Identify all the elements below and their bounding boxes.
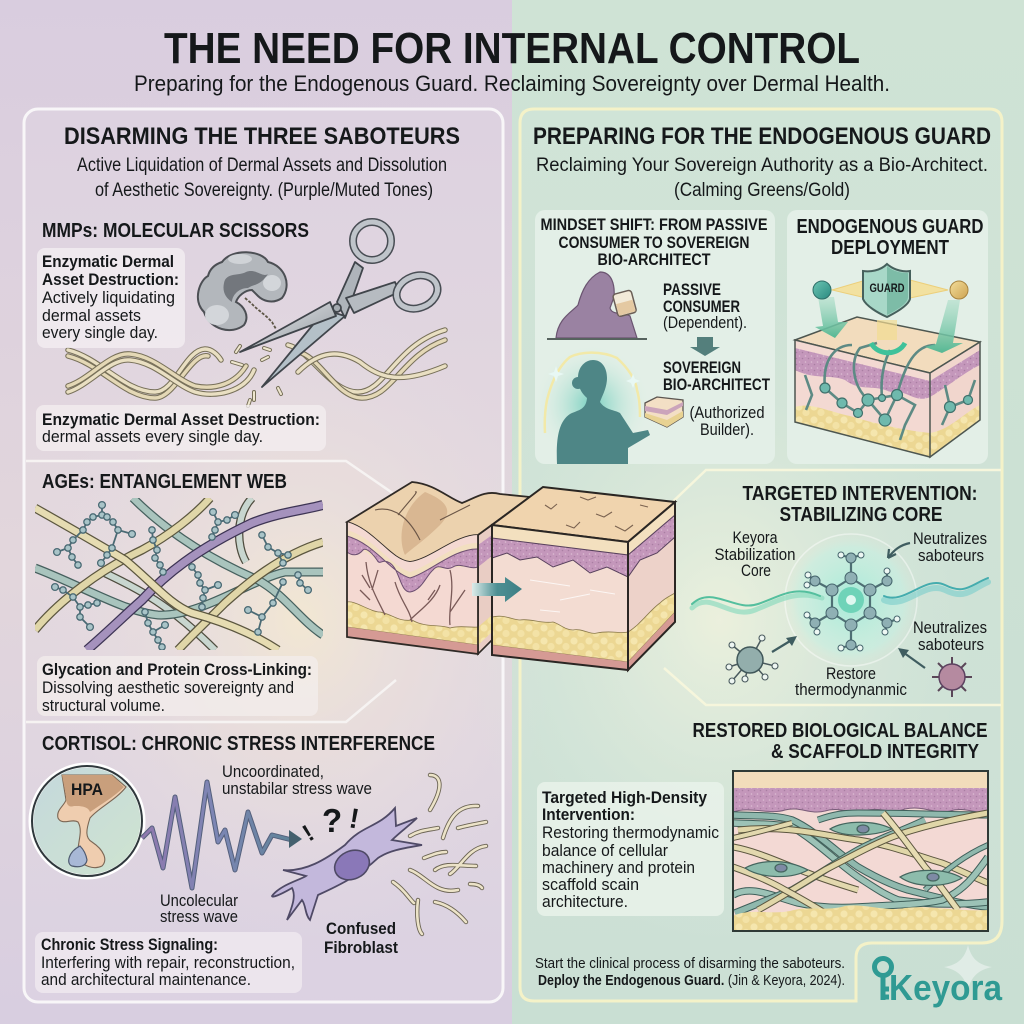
stabilization core label — [714, 529, 796, 580]
callout: targeted high-density — [537, 782, 724, 916]
icon: sovereign architect with aura — [544, 351, 650, 464]
logo: Keyora — [874, 945, 1003, 1008]
neutralizes label top: saboteurs — [918, 547, 984, 565]
callout: glycation and cross-linking: Glycation and Protein Cross-Linking: — [42, 661, 312, 679]
left panel heading: DISARMING THE THREE SABOTEURS — [64, 123, 460, 150]
callout: chronic stress signaling: and architectural maintenance. — [41, 971, 251, 989]
icon: confused fibroblast: ! — [347, 802, 362, 835]
callout: enzymatic destruction bottom: Enzymatic Dermal Asset Destruction: — [42, 411, 320, 429]
callout: glycation and cross-linking: structural volume. — [42, 697, 165, 715]
section: restored biological balance — [537, 668, 1001, 931]
MMPs heading: MMPs: MOLECULAR SCISSORS — [42, 219, 309, 242]
illustration: restored scaffold — [733, 771, 988, 931]
arrow: down — [690, 337, 720, 356]
icon: small grey saboteur — [726, 635, 797, 684]
icon: confused fibroblast — [272, 802, 422, 920]
section: AGEs entanglement web — [26, 461, 394, 716]
icon: teal sphere — [813, 281, 831, 299]
stress wave label bottom: Uncolecular — [160, 892, 238, 910]
AGEs heading: AGEs: ENTANGLEMENT WEB — [42, 470, 287, 493]
section: MMPs molecular scissors — [36, 219, 445, 451]
confused fibroblast label: Confused — [326, 920, 396, 938]
callout: targeted high-density: architecture. — [542, 893, 628, 911]
guard heading — [796, 215, 984, 259]
callout: chronic stress signaling — [35, 932, 302, 993]
closing statement: Start the clinical process of disarming the saboteurs. — [535, 956, 845, 972]
icon: stabilization glow — [785, 534, 917, 666]
icon: small purple saboteur — [898, 648, 972, 697]
left panel subheading — [77, 155, 447, 201]
healthy skin block — [492, 487, 675, 670]
mindset heading — [540, 216, 768, 269]
stress wave label top — [222, 763, 372, 798]
passive consumer text: CONSUMER — [663, 298, 740, 316]
callout: chronic stress signaling: Chronic Stress Signaling: — [41, 936, 218, 954]
right panel subheading: (Calming Greens/Gold) — [674, 180, 850, 201]
icon: wavy energy streams — [692, 578, 988, 612]
closing statement: Deploy the Endogenous Guard. (Jin & Keyora, 2024). — [538, 973, 845, 989]
section: cortisol chronic stress interference — [26, 680, 486, 993]
stress wave label bottom: stress wave — [160, 908, 238, 926]
icon: gold sphere — [950, 281, 968, 299]
right panel subheading: Reclaiming Your Sovereign Authority as a Bio-Architect. — [536, 155, 988, 176]
icon: skin block with network — [795, 317, 980, 457]
icon: guard shield: GUARD — [870, 283, 904, 295]
cortisol heading: CORTISOL: CHRONIC STRESS INTERFERENCE — [42, 732, 435, 755]
passive consumer text: (Dependent). — [663, 314, 747, 332]
restore label: thermodynanmic — [795, 681, 907, 699]
central illustration: skin blocks — [347, 482, 675, 670]
arrow: neutralizes pointer — [888, 543, 910, 558]
icon: guard shield — [863, 264, 910, 317]
arrow: right green beam — [925, 300, 963, 353]
icon: fragmented fibres — [393, 775, 486, 934]
callout: targeted high-density: Intervention: — [542, 806, 635, 824]
icon: twisted collagen fibres — [68, 330, 445, 406]
icon: grey MMP enzyme — [198, 252, 287, 330]
icon: scissors — [240, 222, 442, 387]
icon: hexagonal stabilization molecule — [804, 552, 900, 651]
neutralizes label top: Neutralizes — [913, 530, 987, 548]
stabilization core label: Stabilization — [714, 546, 796, 564]
callout: enzymatic destruction top: dermal assets — [42, 307, 141, 325]
callout: enzymatic destruction top: Enzymatic Dermal — [42, 253, 174, 271]
left panel subheading: Active Liquidation of Dermal Assets and Dissolution — [77, 155, 447, 176]
subtitle: Preparing for the Endogenous Guard. Reclaiming Sovereignty over Dermal Health. — [134, 71, 890, 96]
stabilization core label: Core — [741, 562, 771, 580]
sovereign architect text: Builder). — [700, 421, 754, 439]
callout: enzymatic destruction top: Asset Destruction: — [42, 271, 179, 289]
icon: HPA axis circle: HPA — [71, 781, 103, 799]
neutralizes label top — [913, 530, 987, 565]
passive consumer text — [663, 281, 747, 332]
sovereign architect text: BIO-ARCHITECT — [663, 376, 770, 394]
icon: gold link beams — [832, 280, 948, 298]
closing statement — [535, 956, 845, 989]
panel: disarming the three saboteurs — [24, 109, 503, 1002]
callout: enzymatic destruction bottom: dermal assets every single day. — [42, 428, 263, 446]
callout: targeted high-density: Targeted High-Density — [542, 789, 708, 807]
neutralizes label bottom — [913, 619, 987, 654]
damaged skin block — [347, 482, 530, 654]
passive consumer text: PASSIVE — [663, 281, 721, 299]
icon: cross-link molecule chains — [52, 502, 311, 650]
callout: enzymatic destruction top: every single day. — [42, 324, 158, 342]
callout: targeted high-density: Restoring thermodynamic — [542, 824, 719, 842]
neutralizes label bottom: Neutralizes — [913, 619, 987, 637]
callout: targeted high-density: balance of cellular — [542, 842, 668, 860]
card: endogenous guard deployment — [787, 210, 988, 464]
restore label — [795, 665, 907, 699]
icon: tangled fibre web — [35, 498, 323, 650]
panel: preparing for the endogenous guard — [520, 109, 1003, 1008]
confused fibroblast label — [324, 920, 398, 957]
mindset heading: BIO-ARCHITECT — [598, 251, 710, 269]
icon: confused fibroblast: ! — [298, 820, 319, 847]
card: mindset shift — [534, 210, 775, 465]
restored heading: & SCAFFOLD INTEGRITY — [771, 740, 979, 763]
callout: enzymatic destruction top: Actively liquidating — [42, 289, 175, 307]
logo: Keyora: Keyora — [889, 967, 1003, 1008]
arrow: left green beam — [815, 297, 848, 338]
stress wave label top: Uncoordinated, — [222, 763, 324, 781]
section: targeted intervention — [662, 470, 1001, 699]
callout: enzymatic destruction top — [37, 248, 185, 348]
intervention heading — [742, 482, 978, 526]
guard heading: DEPLOYMENT — [831, 236, 949, 259]
callout: enzymatic destruction bottom — [36, 405, 326, 451]
stress wave label top: unstabilar stress wave — [222, 780, 372, 798]
restored heading — [692, 719, 988, 763]
callout: targeted high-density: scaffold scain — [542, 876, 639, 894]
callout: glycation and cross-linking — [37, 656, 318, 716]
callout: glycation and cross-linking: Dissolving aesthetic sovereignty and — [42, 679, 294, 697]
intervention heading: TARGETED INTERVENTION: — [742, 482, 978, 505]
arrow: damaged to healthy — [472, 577, 522, 602]
sovereign architect text: SOVEREIGN — [663, 359, 741, 377]
mindset heading: CONSUMER TO SOVEREIGN — [558, 234, 750, 252]
guard heading: ENDOGENOUS GUARD — [796, 215, 984, 238]
mindset heading: MINDSET SHIFT: FROM PASSIVE — [540, 216, 768, 234]
icon: stress wave with arrow — [142, 782, 302, 888]
confused fibroblast label: Fibroblast — [324, 939, 398, 957]
neutralizes label bottom: saboteurs — [918, 636, 984, 654]
icon: confused fibroblast: ? — [322, 802, 342, 839]
sovereign architect text — [663, 359, 770, 439]
intervention heading: STABILIZING CORE — [780, 503, 942, 526]
right panel subheading — [536, 155, 988, 201]
left panel subheading: of Aesthetic Sovereignty. (Purple/Muted Tones) — [95, 180, 433, 201]
icon: small skin cube — [645, 397, 683, 427]
title: THE NEED FOR INTERNAL CONTROL — [164, 24, 860, 73]
callout: chronic stress signaling: Interfering with repair, reconstruction, — [41, 954, 295, 972]
stress wave label bottom — [160, 892, 238, 926]
restore label: Restore — [826, 665, 876, 683]
icon: passive consumer silhouette — [547, 272, 647, 339]
callout: targeted high-density: machinery and protein — [542, 859, 695, 877]
stabilization core label: Keyora — [732, 529, 778, 547]
sovereign architect text: (Authorized — [690, 404, 764, 422]
icon: HPA axis circle — [31, 765, 143, 877]
